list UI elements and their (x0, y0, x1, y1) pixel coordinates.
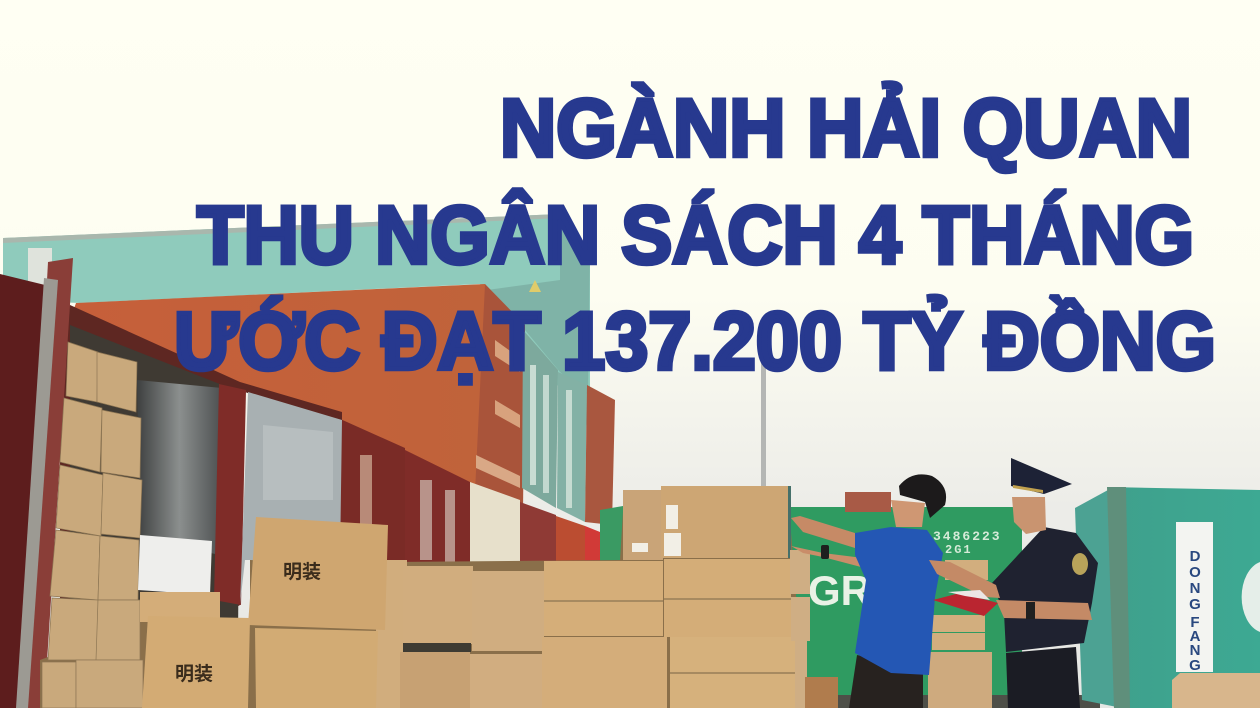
photo: container yard and cargo (0, 214, 1260, 708)
ground strip (800, 695, 1100, 708)
lower box (255, 628, 378, 708)
box with CJK label: 明装 (175, 663, 213, 685)
shadow behind cargo (40, 495, 805, 708)
brown small box (805, 677, 838, 708)
red stack right (585, 385, 615, 525)
DONG FANG label: G (1189, 657, 1201, 674)
small side boxes (376, 560, 407, 708)
title (174, 83, 1216, 387)
DONG FANG label (1176, 522, 1213, 674)
DONG FANG label: F (1190, 614, 1200, 631)
customs officer (929, 458, 1098, 708)
green container: 2G1 (945, 543, 973, 557)
title line 2: THU NGÂN SÁCH 4 THÁNG (197, 190, 1194, 281)
central boxes (400, 486, 810, 708)
box seam lines (403, 598, 795, 674)
box with CJK label: 明装 (283, 561, 321, 583)
shoulder badge (1072, 553, 1088, 575)
bottom right box (1172, 673, 1260, 708)
DONG FANG label: O (1189, 564, 1201, 581)
title line 1: NGÀNH HẢI QUAN (500, 83, 1192, 174)
teal container right (1075, 487, 1260, 708)
stacked boxes behind officer (928, 560, 992, 708)
teal container top (3, 214, 590, 430)
open container interior (60, 305, 342, 708)
man in blue shirt (791, 474, 946, 708)
white carton (138, 535, 212, 595)
box behind (140, 592, 220, 622)
box with CJK label (142, 616, 250, 708)
DONG FANG label: N (1190, 642, 1200, 659)
DONG FANG label: G (1189, 596, 1201, 613)
box with CJK label (248, 517, 388, 630)
container logo (1242, 562, 1260, 632)
box labels (632, 505, 681, 556)
orange container (70, 284, 525, 512)
green container (790, 492, 1022, 697)
title line 3: ƯỚC ĐẠT 137.200 TỶ ĐỒNG (174, 295, 1216, 387)
left door and frame (0, 258, 73, 708)
green container: GR (808, 567, 871, 614)
light pole (761, 340, 766, 486)
stacked pale teal containers (522, 330, 587, 522)
lower row containers (338, 418, 623, 575)
open grey door (240, 392, 342, 605)
DONG FANG label: N (1190, 580, 1200, 597)
cargo boxes left stack (42, 342, 143, 708)
DONG FANG label: D (1190, 548, 1201, 565)
red clipboard (933, 593, 998, 616)
green container: 3486223 (933, 529, 1002, 544)
DONG FANG label: A (1190, 628, 1201, 645)
